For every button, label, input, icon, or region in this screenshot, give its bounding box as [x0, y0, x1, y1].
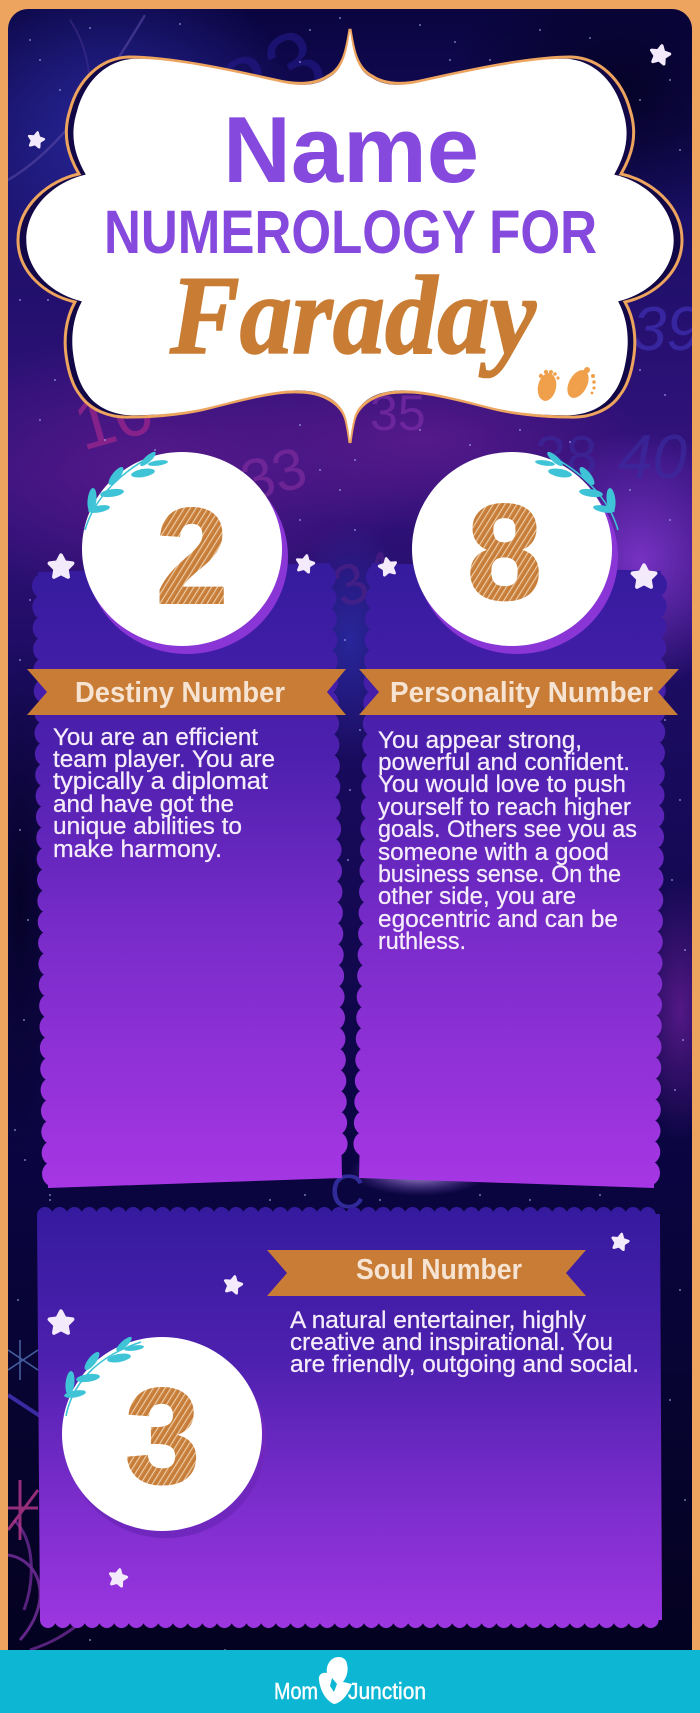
icon: baby footprints [535, 367, 596, 403]
number circle: 2 [82, 452, 288, 654]
text: destiny description: team player. You are [53, 746, 275, 773]
text: personality description: powerful and confident. [378, 749, 630, 776]
title plaque [18, 29, 682, 443]
panel: personality number [359, 450, 679, 1188]
ribbon: destiny number: Destiny Number [75, 677, 285, 709]
logo: MomJunction: Mom [274, 1678, 318, 1704]
text: destiny description: unique abilities to [53, 813, 242, 840]
ribbon: soul number [267, 1250, 586, 1296]
footer bar [0, 1650, 700, 1713]
text: destiny description: typically a diplomat [53, 768, 268, 795]
number circle: 8: 8 [467, 476, 542, 628]
text: personality description: other side, you are [378, 883, 576, 910]
text: personality description: ruthless. [378, 928, 466, 955]
number circle: 2: 2 [156, 480, 228, 632]
faint numbers in the sky: 39 [632, 295, 700, 364]
faint arcs and flares [8, 15, 145, 1650]
text: personality description: You appear strong, [378, 727, 582, 754]
panel: destiny number [27, 450, 346, 1188]
title line: Faraday: Faraday [169, 254, 537, 378]
text: personality description: business sense. On the [378, 861, 621, 888]
number circle: 8 [412, 452, 618, 654]
icon: teal leaf branch [535, 450, 618, 530]
text: destiny description: make harmony. [53, 836, 222, 863]
logo: MomJunction: Junction [348, 1678, 426, 1704]
faint numbers in the sky: 40 [618, 423, 687, 492]
panel: soul number [37, 1214, 662, 1620]
text: soul description: are friendly, outgoing and social. [290, 1351, 639, 1378]
faint numbers in the sky: 10 [65, 369, 162, 465]
icon: teal leaf branch [64, 1335, 144, 1416]
ribbon: soul number: Soul Number [356, 1254, 522, 1286]
faint numbers in the sky [65, 8, 700, 1219]
ribbon: destiny number [27, 669, 346, 715]
faint numbers in the sky: 83 [203, 8, 341, 146]
faint numbers in the sky: 38 [535, 424, 597, 487]
text: personality description [378, 727, 637, 955]
faint numbers in the sky: C [330, 1166, 365, 1219]
text: destiny description [53, 724, 275, 863]
text: soul description: A natural entertainer, highly [290, 1307, 587, 1334]
text: personality description: egocentric and can be [378, 906, 618, 933]
number circle: 3: 3 [125, 1360, 200, 1512]
title line: Name: Name [223, 97, 479, 202]
text: soul description: creative and inspirational. You [290, 1329, 613, 1356]
number circle: 3 [62, 1337, 266, 1538]
text: personality description: yourself to reach higher [378, 794, 631, 821]
ribbon: personality number [359, 669, 679, 715]
faint numbers in the sky: 34 [324, 538, 407, 621]
text: destiny description: You are an efficient [53, 724, 258, 751]
logo: MomJunction [274, 1657, 426, 1704]
icon: teal leaf branch [85, 450, 168, 530]
text: destiny description: and have got the [53, 791, 234, 818]
text: personality description: goals. Others see you as [378, 816, 637, 843]
title line: Numerology for: NUMEROLOGY FOR [104, 198, 597, 266]
ribbon: personality number: Personality Number [390, 677, 653, 709]
faint numbers in the sky: 33 [234, 435, 314, 515]
text: personality description: someone with a good [378, 839, 609, 866]
text: soul description [290, 1307, 639, 1378]
faint numbers in the sky: 35 [370, 385, 426, 441]
text: personality description: You would love to push [378, 771, 626, 798]
